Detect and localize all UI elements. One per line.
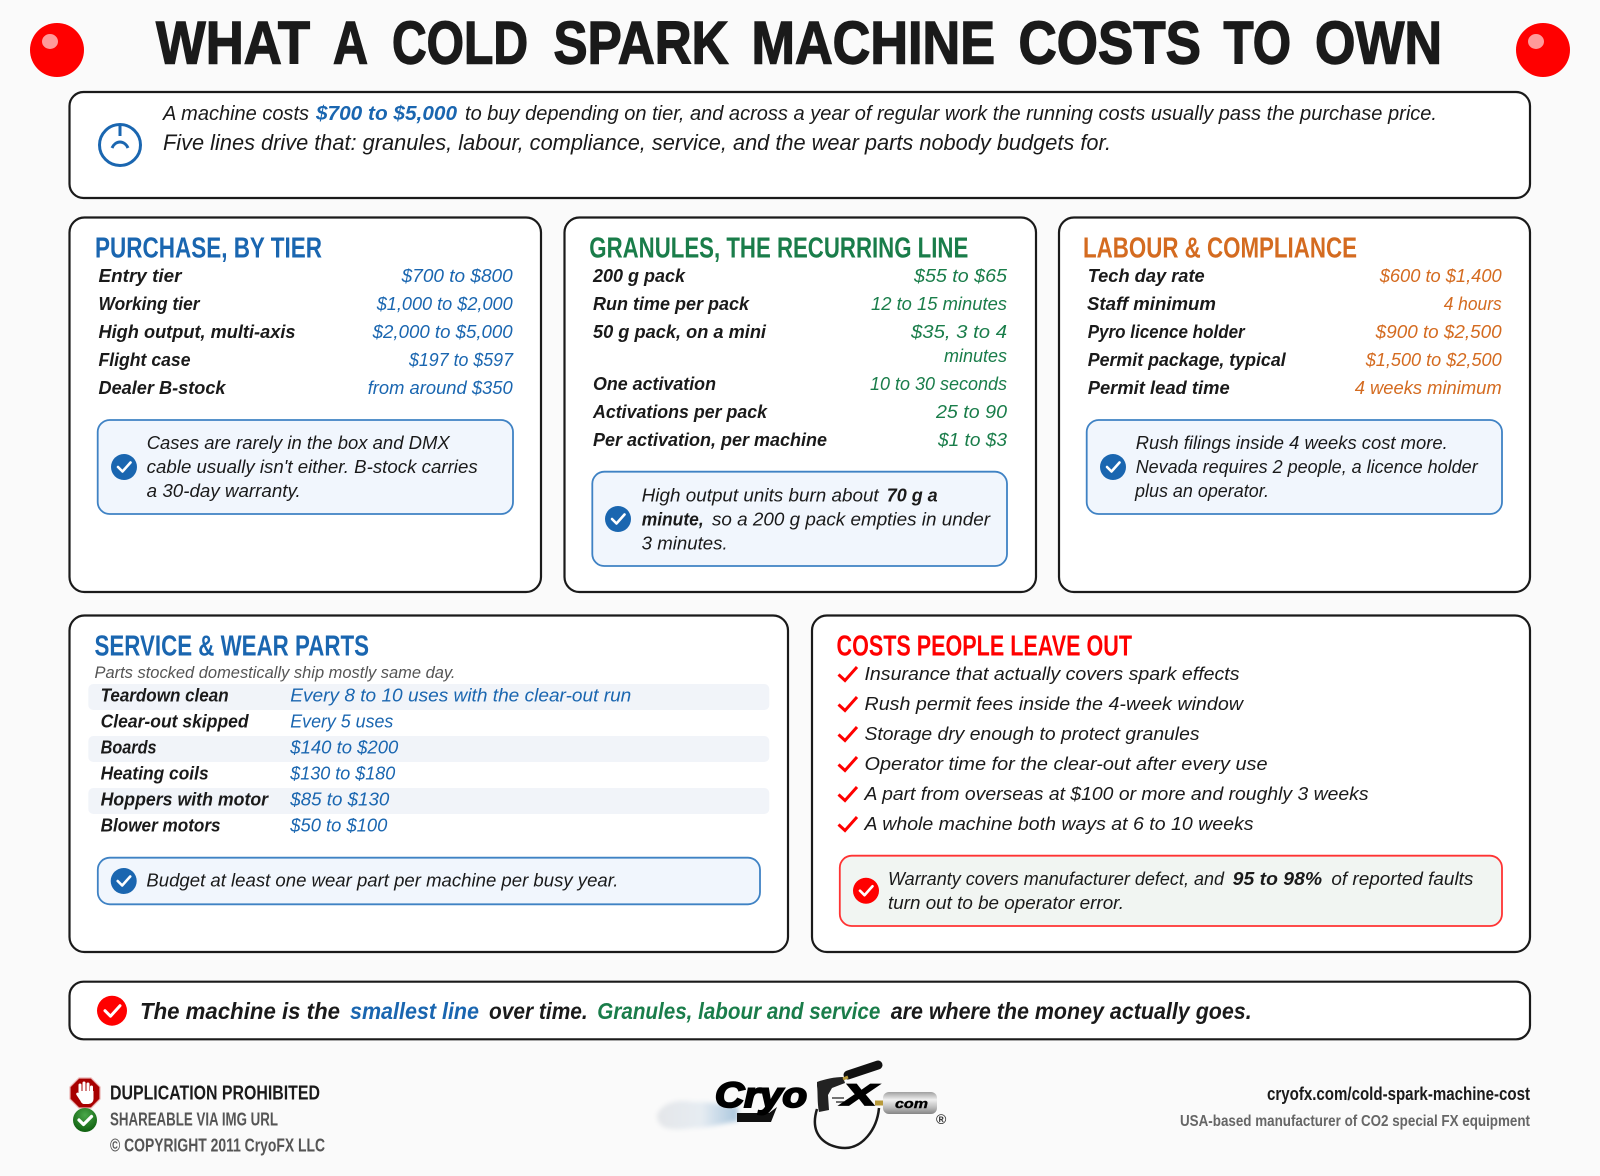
banner: takeaway [70,982,1530,1039]
panel: service and wear parts [70,616,788,952]
icon: right red dot [1516,23,1570,77]
list: left-out items: Operator time for the clear-out after every use [864,753,1268,774]
table: service rows: Teardown clean [101,685,229,706]
text: intro copy [161,102,1437,155]
footer: source [1180,1084,1531,1130]
callout: warranty note: of reported faults [1331,868,1473,889]
rows: purchase: Working tier [98,293,201,314]
callout: purchase note: cable usually isn't either. B-stock carries [147,456,478,477]
callout: service note [98,858,760,904]
text: shareable: SHAREABLE VIA IMG URL [110,1110,278,1130]
callout: granules note: 70 g a [887,485,938,506]
icon: red check [97,996,127,1026]
subtitle: service: Parts stocked domestically ship mostly same day. [94,663,456,682]
text: takeaway: over time. [489,998,588,1024]
callout: purchase note: Cases are rarely in the box and DMX [147,432,450,453]
list: left-out items [838,663,1368,834]
rows: granules: 10 to 30 seconds [870,373,1007,394]
canister: com [895,1096,929,1111]
rows: granules [592,265,1008,450]
callout: service note: Budget at least one wear part per machine per busy year. [146,870,618,891]
footer: legal [70,1078,325,1156]
rows: labour: Permit lead time [1088,377,1230,398]
rows: purchase: $197 to $597 [408,349,514,370]
text: tagline: USA-based manufacturer of CO2 special FX equipment [1180,1113,1531,1130]
table: service rows: $85 to $130 [289,788,390,809]
callout: granules note: so a 200 g pack empties in under [712,509,991,530]
rows: labour: $900 to $2,500 [1375,321,1502,342]
title: OWN [1315,10,1442,76]
rows: labour: $1,500 to $2,500 [1365,349,1502,370]
callout: granules note: minute, [642,509,704,530]
rows: purchase: $2,000 to $5,000 [372,321,513,342]
rows: granules: 12 to 15 minutes [871,293,1007,314]
callout: warranty note [840,856,1502,926]
rows: granules: 50 g pack, on a mini [593,321,767,342]
heading: labour: LABOUR & COMPLIANCE [1083,232,1357,264]
table: service rows: Hoppers with motor [101,788,270,809]
title: COLD [392,10,528,76]
heading: granules: GRANULES, THE RECURRING LINE [589,232,968,264]
list: left-out items: A part from overseas at $100 or more and roughly 3 weeks [863,783,1368,804]
rows: labour [1087,265,1502,398]
heading: purchase: PURCHASE, BY TIER [95,232,322,264]
rows: purchase [98,265,514,398]
callout: granules note [592,472,1007,566]
icon: stop hand [70,1078,100,1108]
rows: labour: 4 hours [1444,293,1502,314]
callout: warranty note: turn out to be operator error. [888,892,1124,913]
rows: labour: Pyro licence holder [1088,321,1246,342]
callout: labour note: Rush filings inside 4 weeks cost more. [1136,432,1448,453]
rows: granules: $55 to $65 [913,265,1008,286]
table: service rows [88,684,769,836]
text: intro copy: $700 to $5,000 [315,102,458,125]
callout: purchase note [98,420,513,514]
hose [815,1108,879,1148]
rows: purchase: Flight case [98,349,190,370]
rows: granules: 25 to 90 [935,401,1008,422]
title: MACHINE [752,10,995,76]
table: service rows: $130 to $180 [289,762,396,783]
table: service rows: Clear-out skipped [101,710,249,732]
table: service rows: Every 5 uses [290,710,393,732]
text: takeaway [140,998,1252,1024]
registered mark: ® [936,1111,947,1127]
title: A [333,10,368,76]
text: copyright: © COPYRIGHT 2011 CryoFX LLC [110,1136,325,1156]
table: service rows: $50 to $100 [289,814,388,836]
icon: green check [73,1108,97,1132]
wordmark: Cryo [715,1076,807,1115]
table: service rows: $140 to $200 [289,736,399,757]
text: intro copy: to buy depending on tier, and across a year of regular work the running costs usually pass the purchase price. [465,102,1437,125]
rows: purchase: $1,000 to $2,000 [376,293,513,314]
rows: purchase: $700 to $800 [401,265,513,286]
table: service rows: Boards [101,736,157,757]
list: left-out items: Storage dry enough to protect granules [864,723,1200,744]
list: left-out items: Insurance that actually covers spark effects [864,663,1240,684]
text: takeaway: Granules, labour and service [597,998,880,1024]
table: service rows: Every 8 to 10 uses with the clear-out run [290,685,631,706]
text: url: cryofx.com/cold-spark-machine-cost [1267,1084,1530,1104]
icon: gauge clock [100,124,140,166]
rows: labour: Permit package, typical [1088,349,1287,370]
rows: granules: Run time per pack [593,293,751,314]
tube [737,1107,777,1122]
table: service rows: Blower motors [101,814,221,836]
callout: labour note: plus an operator. [1134,480,1269,501]
panel: costs people leave out [812,616,1530,952]
rows: purchase: Entry tier [98,265,183,286]
list: left-out items: Rush permit fees inside the 4-week window [864,693,1245,714]
text: intro copy: Five lines drive that: granules, labour, compliance, service, and the wear parts nobody budgets for. [163,130,1111,155]
callout: purchase note: a 30-day warranty. [147,480,301,501]
icon: left red dot [30,23,84,77]
rows: granules: 200 g pack [592,265,687,286]
rows: granules: $1 to $3 [937,429,1008,450]
title: SPARK [554,10,728,76]
text: takeaway: The machine is the [140,998,340,1024]
text: takeaway: are where the money actually goes. [891,998,1252,1024]
canister [875,1092,937,1114]
logo: CryoFX [657,1065,947,1148]
heading: costs left out: COSTS PEOPLE LEAVE OUT [836,630,1132,662]
callout: granules note: High output units burn about [642,485,880,506]
rows: purchase: High output, multi-axis [98,321,296,342]
panel: granules [564,218,1036,592]
heading: service: SERVICE & WEAR PARTS [94,630,369,662]
callout: labour note [1087,420,1502,514]
rows: labour: Tech day rate [1088,265,1205,286]
cloud [657,1101,738,1129]
rows: granules: Per activation, per machine [593,429,827,450]
callout: warranty note: Warranty covers manufacturer defect, and [888,868,1225,889]
title: WHAT [156,10,310,76]
rows: purchase: from around $350 [368,377,513,398]
rows: labour: Staff minimum [1087,293,1216,314]
text: duplication: DUPLICATION PROHIBITED [110,1082,320,1104]
rows: labour: $600 to $1,400 [1379,265,1502,286]
rows: purchase: Dealer B-stock [98,377,227,398]
list: left-out items: A whole machine both ways at 6 to 10 weeks [863,813,1254,834]
title: TO [1224,10,1291,76]
rows: granules: One activation [593,373,716,394]
panel: intro [70,92,1530,198]
table: service rows: Heating coils [101,762,209,783]
text: takeaway: smallest line [350,998,479,1024]
rows: granules: minutes [944,345,1007,366]
rows: labour: 4 weeks minimum [1355,377,1502,398]
callout: labour note: Nevada requires 2 people, a licence holder [1136,456,1479,477]
rows: granules: Activations per pack [592,401,769,422]
title: COSTS [1018,10,1201,76]
rows: granules: $35, 3 to 4 [910,321,1007,342]
callout: warranty note: 95 to 98% [1233,868,1322,889]
callout: granules note: 3 minutes. [642,532,728,554]
panel: purchase by tier [70,218,541,592]
text: intro copy: A machine costs [161,102,309,125]
wordmark FX: X [840,1079,879,1112]
title [156,10,1442,76]
gun [817,1065,878,1112]
panel: labour and compliance [1059,218,1530,592]
